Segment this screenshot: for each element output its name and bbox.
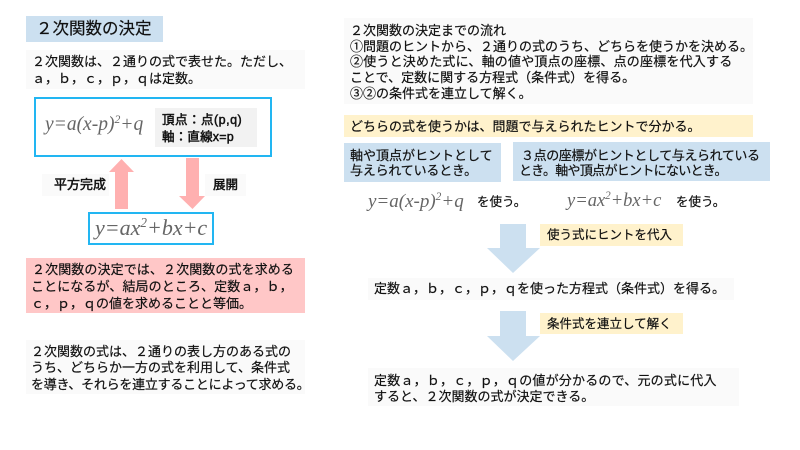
text block: conclusion: すると、２次関数の式が決定できる。: [374, 389, 594, 404]
callout: which form to use: [344, 115, 753, 137]
formula: general form use: [566, 190, 725, 211]
panel: flow overview: ③②の条件式を連立して解く。: [350, 86, 532, 101]
vertex and axis note: [155, 108, 257, 147]
callout: determining the function: ｃ，ｐ，ｑの値を求めることと等価。: [31, 296, 252, 311]
vertex and axis note: 軸：直線x=p: [162, 130, 234, 144]
formula: vertex form use: を使う。: [477, 195, 526, 209]
label: substitute hints: [540, 224, 683, 246]
callout: determining the function: ２次関数の決定では、２次関数の式を求める: [32, 262, 294, 277]
label: solve simultaneously: [540, 313, 683, 334]
text block: conclusion: 定数ａ，ｂ，ｃ，ｐ，ｑの値が分かるので、元の式に代入: [374, 373, 717, 388]
label: completing the square: [42, 174, 109, 196]
text block: method summary: を導き、それらを連立することによって求める。: [31, 377, 310, 392]
text block: method summary: [26, 340, 305, 394]
text block: obtain equations: [368, 278, 734, 300]
label: expansion: 展開: [213, 178, 238, 192]
label: expansion: [205, 174, 246, 196]
text block: method summary: ２次関数の式は、２通りの表し方のある式の: [31, 344, 291, 359]
panel: vertex form: y=a(x-p)2+q: [45, 113, 143, 135]
label: substitute hints: 使う式にヒントを代入: [547, 228, 672, 242]
panel: hint is axis or vertex: 与えられているとき。: [350, 163, 477, 178]
callout: determining the function: ことになるが、結局のところ、定数ａ，ｂ，: [31, 279, 293, 294]
panel: general form: [88, 212, 214, 245]
label: solve simultaneously: 条件式を連立して解く: [547, 317, 672, 331]
formula: general form use: を使う。: [676, 195, 725, 209]
panel: vertex form: [34, 97, 272, 157]
panel: hint is three points: ３点の座標がヒントとして与えられている: [521, 148, 760, 163]
panel: hint is axis or vertex: 軸や頂点がヒントとして: [350, 148, 493, 163]
title: [26, 16, 163, 42]
panel: flow overview: [344, 18, 753, 104]
text block: method summary: うち、どちらか一方の式を利用して、条件式: [31, 360, 290, 375]
formula: vertex form use: [366, 191, 526, 212]
panel: flow overview: ことで、定数に関する方程式（条件式）を得る。: [350, 70, 635, 85]
callout: which form to use: どちらの式を使うかは、問題で与えられたヒントで分かる。: [350, 119, 700, 134]
label: completing the square: 平方完成: [54, 177, 106, 192]
formula: general form use: y=ax2+bx+c: [567, 190, 661, 211]
panel: flow overview: ②使うと決めた式に、軸の値や頂点の座標、点の座標を代入する: [350, 54, 732, 69]
panel: flow overview: ①問題のヒントから、２通りの式のうち、どちらを使うかを決める。: [350, 39, 753, 54]
title: ２次関数の決定: [36, 20, 152, 38]
formula: vertex form use: y=a(x-p)2+q: [368, 191, 464, 212]
panel: flow overview: ２次関数の決定までの流れ: [350, 23, 506, 38]
callout: determining the function: [26, 258, 305, 313]
vertex and axis note: 頂点：点(p,q): [162, 113, 242, 127]
panel: hint is axis or vertex: [344, 143, 501, 182]
panel: hint is three points: [513, 142, 770, 181]
text block: two forms intro: ２次関数は、２通りの式で表せた。ただし、: [32, 54, 292, 69]
text block: obtain equations: 定数ａ，ｂ，ｃ，ｐ，ｑを使った方程式（条件式）を得る。: [374, 281, 725, 296]
text block: two forms intro: [26, 50, 305, 89]
text block: conclusion: [368, 368, 739, 406]
panel: hint is three points: とき。軸や頂点がヒントにないとき。: [519, 163, 727, 178]
text block: two forms intro: ａ，ｂ，ｃ，ｐ，ｑは定数。: [32, 71, 201, 86]
panel: general form: y=ax2+bx+c: [95, 215, 207, 240]
